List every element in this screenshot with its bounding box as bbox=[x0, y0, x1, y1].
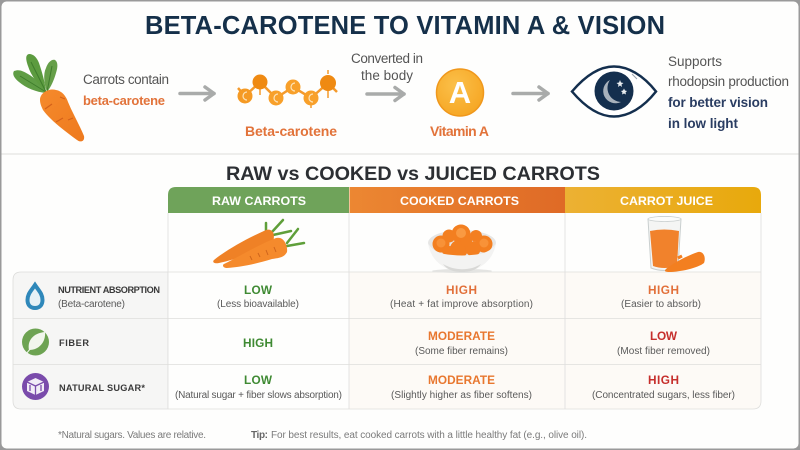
text: converted in the body bbox=[351, 51, 423, 83]
panel: cells background bbox=[168, 213, 761, 409]
value: juice high: HIGH bbox=[648, 373, 679, 387]
value: cooked moderate bbox=[391, 373, 532, 401]
value: raw high: HIGH bbox=[243, 336, 273, 350]
row: fiber bbox=[22, 328, 710, 357]
label: nutrient absorption: NUTRIENT ABSORPTION bbox=[58, 285, 160, 295]
value: cooked high: (Heat + fat improve absorption) bbox=[390, 299, 533, 310]
header: raw carrots bbox=[168, 187, 349, 213]
icon: raw carrots bbox=[213, 220, 304, 268]
icon: sugar cube bbox=[22, 373, 49, 400]
tip: Tip: bbox=[251, 430, 268, 441]
icon: vitamin A: A bbox=[449, 75, 471, 110]
icon: eye with moon bbox=[572, 66, 656, 116]
label: vitamin A: Vitamin A bbox=[430, 123, 489, 139]
icon: vitamin A bbox=[436, 69, 484, 116]
value: juice high: HIGH bbox=[648, 283, 679, 297]
header: carrot juice: CARROT JUICE bbox=[620, 194, 713, 208]
value: juice low bbox=[617, 329, 710, 357]
value: juice high bbox=[621, 283, 701, 310]
value: cooked moderate: MODERATE bbox=[428, 329, 495, 343]
arrow bbox=[513, 87, 548, 100]
text: supports rhodopsin production: for better vision bbox=[668, 95, 768, 110]
tip: For best results, eat cooked carrots with a little healthy fat (e.g., olive oil). bbox=[271, 430, 587, 441]
text: converted in the body: Converted in bbox=[351, 51, 423, 66]
value: juice high: (Concentrated sugars, less fiber) bbox=[592, 390, 735, 401]
title: BETA-CAROTENE TO VITAMIN A & VISION bbox=[145, 12, 665, 40]
header: raw carrots: RAW CARROTS bbox=[212, 194, 306, 208]
row: natural sugar bbox=[22, 373, 735, 401]
panel: conversion pathway bbox=[13, 51, 789, 141]
value: juice low: (Most fiber removed) bbox=[617, 346, 710, 357]
footnote: *Natural sugars. Values are relative. bbox=[58, 430, 206, 441]
value: raw low: LOW bbox=[244, 373, 273, 387]
value: raw low bbox=[175, 373, 342, 401]
text: supports rhodopsin production: rhodopsin production bbox=[668, 74, 789, 89]
value: cooked high: HIGH bbox=[446, 283, 477, 297]
text: supports rhodopsin production: Supports bbox=[668, 54, 722, 69]
value: raw low bbox=[217, 283, 299, 310]
label: beta-carotene: Beta-carotene bbox=[245, 123, 337, 139]
icon: carrot juice glass bbox=[648, 216, 705, 272]
text: carrots contain: beta-carotene bbox=[83, 93, 165, 108]
label: natural sugar: NATURAL SUGAR* bbox=[59, 383, 145, 393]
value: juice low: LOW bbox=[650, 329, 678, 343]
value: cooked moderate bbox=[415, 329, 508, 357]
label: nutrient absorption: (Beta-carotene) bbox=[58, 299, 125, 310]
icon: cooked carrots bowl bbox=[428, 224, 496, 273]
text: supports rhodopsin production: in low light bbox=[668, 116, 738, 131]
arrow bbox=[180, 87, 214, 100]
text: converted in the body: the body bbox=[361, 68, 413, 83]
label: nutrient absorption bbox=[58, 285, 160, 310]
panel: row labels background bbox=[13, 272, 168, 409]
value: juice high bbox=[592, 373, 735, 401]
value: raw low: (Natural sugar + fiber slows absorption) bbox=[175, 390, 342, 401]
icon: carrot bbox=[13, 54, 84, 141]
value: juice high: (Easier to absorb) bbox=[621, 299, 701, 310]
header: carrot juice bbox=[565, 187, 761, 213]
value: cooked high bbox=[390, 283, 533, 310]
arrow bbox=[367, 88, 404, 100]
comparison table bbox=[13, 187, 761, 409]
row: nutrient absorption bbox=[28, 283, 701, 310]
text: carrots contain: Carrots contain bbox=[83, 72, 169, 87]
text: supports rhodopsin production bbox=[668, 54, 789, 131]
text: carrots contain bbox=[83, 72, 169, 108]
header: cooked carrots: COOKED CARROTS bbox=[400, 194, 519, 208]
icon: beta-carotene molecule bbox=[238, 70, 337, 108]
label: fiber: FIBER bbox=[59, 338, 89, 348]
value: cooked moderate: MODERATE bbox=[428, 373, 495, 387]
icon: leaf bbox=[22, 328, 49, 356]
value: raw low: (Less bioavailable) bbox=[217, 299, 299, 310]
value: raw low: LOW bbox=[244, 283, 273, 297]
heading: comparison: RAW vs COOKED vs JUICED CARROTS bbox=[226, 163, 600, 185]
header: cooked carrots bbox=[350, 187, 565, 213]
value: cooked moderate: (Some fiber remains) bbox=[415, 346, 508, 357]
icon: water drop bbox=[28, 285, 42, 308]
value: cooked moderate: (Slightly higher as fiber softens) bbox=[391, 390, 532, 401]
